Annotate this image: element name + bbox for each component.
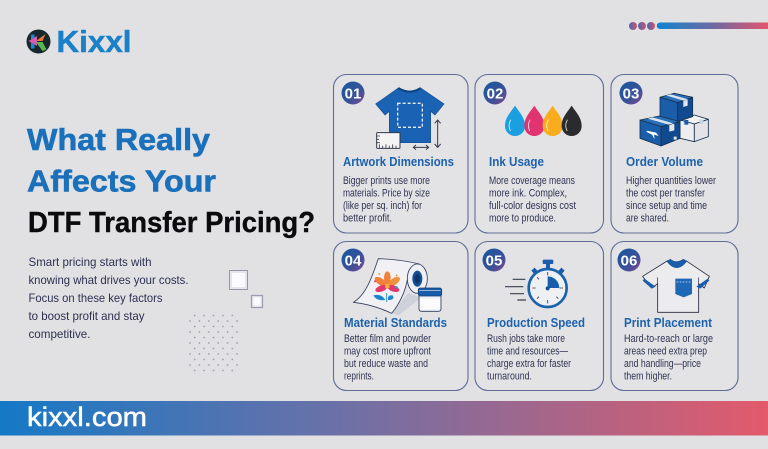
- body text: may cost more upfront: [344, 346, 431, 358]
- body text: reprints.: [344, 370, 374, 382]
- title: Affects Your: [27, 164, 216, 198]
- intro paragraph: Smart pricing starts with: [28, 255, 152, 269]
- badge 02: 02: [487, 85, 503, 102]
- panel 03: order volume: [611, 74, 738, 233]
- body text: them higher.: [624, 370, 672, 382]
- panel 02: ink usage: [475, 74, 604, 233]
- badge 05: 05: [486, 252, 502, 269]
- decorative dot grid: [187, 312, 239, 372]
- body text: [626, 175, 716, 224]
- footer url: kixxl.com: [27, 402, 147, 432]
- body text: but reduce waste and: [344, 358, 428, 370]
- panel 06: print placement: [611, 242, 738, 390]
- heading: Ink Usage: [489, 154, 544, 169]
- intro paragraph: to boost profit and stay: [28, 309, 144, 323]
- body text: better profit.: [343, 212, 392, 224]
- icon: blue t-shirt with ruler and arrows: [376, 88, 444, 150]
- icon: stopwatch with speed lines: [505, 260, 567, 307]
- icon: four ink drops: [505, 106, 582, 136]
- body text: [624, 333, 713, 382]
- badge 04: 04: [345, 252, 362, 269]
- body text: time and resources—: [487, 346, 568, 358]
- badge 02: [484, 82, 506, 104]
- body text: are shared.: [626, 212, 669, 224]
- panel 04: material standards: [334, 242, 468, 390]
- heading: Material Standards: [344, 315, 447, 330]
- badge 01: 01: [345, 85, 361, 102]
- body text: turnaround.: [487, 370, 532, 382]
- logo icon: [26, 30, 50, 54]
- badge 04: [342, 248, 364, 272]
- body text: charge extra for faster: [487, 358, 571, 370]
- panel 05: production speed: [475, 242, 604, 390]
- body text: (like per sq. inch) for: [343, 200, 422, 212]
- logo wordmark: Kixxl: [56, 24, 132, 59]
- title: DTF Transfer Pricing?: [28, 207, 315, 239]
- body text: full-color designs cost: [489, 200, 576, 212]
- badge 03: [620, 82, 642, 104]
- heading: Order Volume: [626, 154, 703, 169]
- panel 01: artwork dimensions: [334, 74, 468, 233]
- body text: Hard-to-reach or large: [624, 333, 713, 345]
- body text: and handling—price: [624, 358, 701, 370]
- body text: areas need extra prep: [624, 346, 707, 358]
- badge 06: 06: [621, 252, 637, 269]
- body text: More coverage means: [489, 175, 575, 187]
- body text: Higher quantities lower: [626, 175, 716, 187]
- body text: materials. Price by size: [343, 188, 430, 200]
- heading: Print Placement: [624, 315, 713, 330]
- body text: [489, 175, 576, 224]
- body text: [487, 333, 571, 382]
- body text: more to produce.: [489, 212, 556, 224]
- heading: Artwork Dimensions: [343, 154, 454, 169]
- logo: Kixxl: [26, 24, 132, 59]
- intro paragraph: knowing what drives your costs.: [28, 273, 188, 287]
- intro paragraph: competitive.: [28, 327, 90, 341]
- decorative squares: [230, 270, 262, 308]
- intro paragraph: [28, 255, 188, 341]
- body text: Rush jobs take more: [487, 333, 565, 345]
- body text: since setup and time: [626, 200, 707, 212]
- badge 03: 03: [623, 85, 639, 102]
- title: What Really: [27, 122, 211, 157]
- heading: Production Speed: [487, 315, 585, 330]
- icon: stacked boxes: [640, 93, 708, 146]
- badge 01: [342, 82, 364, 104]
- decoration: top right dots and bar: [629, 22, 768, 30]
- footer band: [0, 401, 768, 436]
- body text: Better film and powder: [344, 333, 431, 345]
- badge 06: [618, 248, 640, 272]
- icon: white t-shirt with blue pocket: [643, 259, 709, 312]
- intro paragraph: Focus on these key factors: [28, 291, 162, 305]
- icon: film roll and powder jar: [353, 259, 442, 315]
- body text: [344, 333, 431, 382]
- badge 05: [482, 248, 506, 272]
- title: [27, 122, 315, 239]
- body text: [343, 175, 430, 224]
- body text: the cost per transfer: [626, 188, 705, 200]
- body text: Bigger prints use more: [343, 175, 430, 187]
- flower artwork: [373, 271, 402, 302]
- body text: more ink. Complex,: [489, 188, 567, 200]
